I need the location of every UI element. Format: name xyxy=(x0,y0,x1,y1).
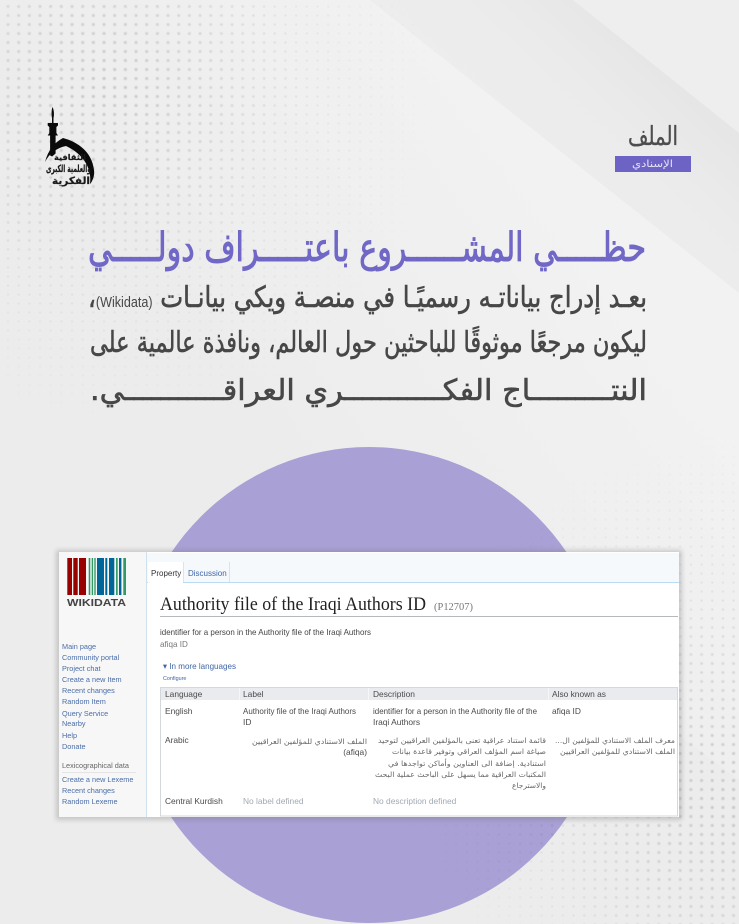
logo xyxy=(45,107,94,187)
body text: النتـــــــــاج الفكـــــــــــري العراقـــــــــــي. xyxy=(90,373,647,408)
lexicographical links: Random Lexeme xyxy=(62,797,118,806)
row: Arabic: معرف الملف الاستنادي للمؤلفين ال... xyxy=(555,736,675,745)
body text xyxy=(88,280,647,408)
languages toggle xyxy=(163,661,236,682)
section label xyxy=(615,122,691,172)
navigation links: Create a new Item xyxy=(62,675,122,684)
navigation links: Help xyxy=(62,731,77,740)
page heading: (P12707) xyxy=(434,602,473,613)
row: Arabic: استنادية. إضافة الى العناوين وأماكن تواجدها في xyxy=(388,758,546,768)
background xyxy=(6,5,318,340)
row: English: afiqa ID xyxy=(552,706,581,716)
page heading: Authority file of the Iraqi Authors ID xyxy=(160,595,426,615)
table header xyxy=(165,689,606,699)
row: English: English xyxy=(165,706,193,716)
navigation links: Donate xyxy=(62,742,86,751)
description xyxy=(160,628,371,649)
calligraphy text: الفكرية xyxy=(52,176,90,187)
row: Central Kurdish: No description defined xyxy=(373,796,457,806)
purple circle xyxy=(131,447,607,923)
languages toggle: Configure xyxy=(163,676,186,682)
tabs: Property xyxy=(151,569,181,578)
row: Arabic: (afiqa) xyxy=(343,747,367,757)
page heading xyxy=(160,595,678,617)
calligraphy text xyxy=(46,153,91,187)
calligraphy text: الثقافية xyxy=(54,153,86,162)
table header: Also known as xyxy=(552,689,606,699)
tabs: Discussion xyxy=(188,569,227,578)
row: Arabic: قائمة استناد عراقية تعنى بالمؤلفين العراقيين لتوحيد xyxy=(378,736,546,745)
row: Central Kurdish xyxy=(165,796,457,806)
screenshot panel shadow xyxy=(56,550,682,820)
navigation links: Recent changes xyxy=(62,686,115,695)
row: Arabic: Arabic xyxy=(165,735,189,745)
lexicographical links: Lexicographical data xyxy=(62,761,130,770)
row: Arabic: صياغة اسم المؤلف العراقي وتوفير قاعدة بيانات xyxy=(392,747,546,756)
dot overlay: lower right xyxy=(509,510,736,924)
row: Central Kurdish: Central Kurdish xyxy=(165,796,223,806)
navigation links: Main page xyxy=(62,642,96,651)
navigation links: Random Item xyxy=(62,697,106,706)
description: afiqa ID xyxy=(160,640,188,649)
table header: Description xyxy=(373,689,415,699)
row: English: Authority file of the Iraqi Authors xyxy=(243,706,356,716)
row: English: ID xyxy=(243,717,251,727)
tabs xyxy=(147,553,679,583)
wikidata logo: WIKIDATA xyxy=(67,598,126,609)
icon: dome xyxy=(45,138,94,184)
row: Central Kurdish: No label defined xyxy=(243,796,304,806)
calligraphy text: والعلمية الكبرى xyxy=(46,164,91,175)
row: English xyxy=(165,706,581,727)
wikidata logo xyxy=(67,558,126,609)
navigation links: Query Service xyxy=(62,709,108,718)
row: Arabic: والاسترجاع xyxy=(512,781,546,790)
navigation links: Nearby xyxy=(62,719,86,728)
tag: authority: الإسنادي xyxy=(632,159,673,170)
row: Arabic: الملف الاستنادي للمؤلفين العراقيين xyxy=(252,737,367,746)
heading: file: الملف xyxy=(628,122,678,152)
row: Arabic xyxy=(165,735,675,790)
lexicographical links xyxy=(62,761,136,806)
body text: بعـد إدراج بياناتـه رسميًـا في منصـة ويكي بيانـات (Wikidata)، xyxy=(88,280,647,315)
table header: Language xyxy=(165,689,203,699)
row: English: Iraqi Authors xyxy=(373,717,420,727)
lexicographical links: Create a new Lexeme xyxy=(62,775,133,784)
languages toggle: ▾ In more languages xyxy=(163,661,236,671)
row: Arabic: الملف الاستنادي للمؤلفين العراقيين xyxy=(560,747,675,756)
navigation links xyxy=(62,642,122,751)
sidebar xyxy=(59,552,147,817)
languages table xyxy=(160,688,678,816)
navigation links: Project chat xyxy=(62,664,101,673)
row: English: identifier for a person in the Authority file of the xyxy=(373,706,537,716)
navigation links: Community portal xyxy=(62,653,120,662)
description: identifier for a person in the Authority file of the Iraqi Authors xyxy=(160,628,371,637)
row: Arabic: المكتبات العراقية مما يسهل على الباحث عملية البحث xyxy=(375,770,546,779)
table header: Label xyxy=(243,689,264,699)
icon: minaret xyxy=(48,107,58,156)
screenshot panel: wikidata xyxy=(59,552,679,817)
lexicographical links: Recent changes xyxy=(62,786,115,795)
